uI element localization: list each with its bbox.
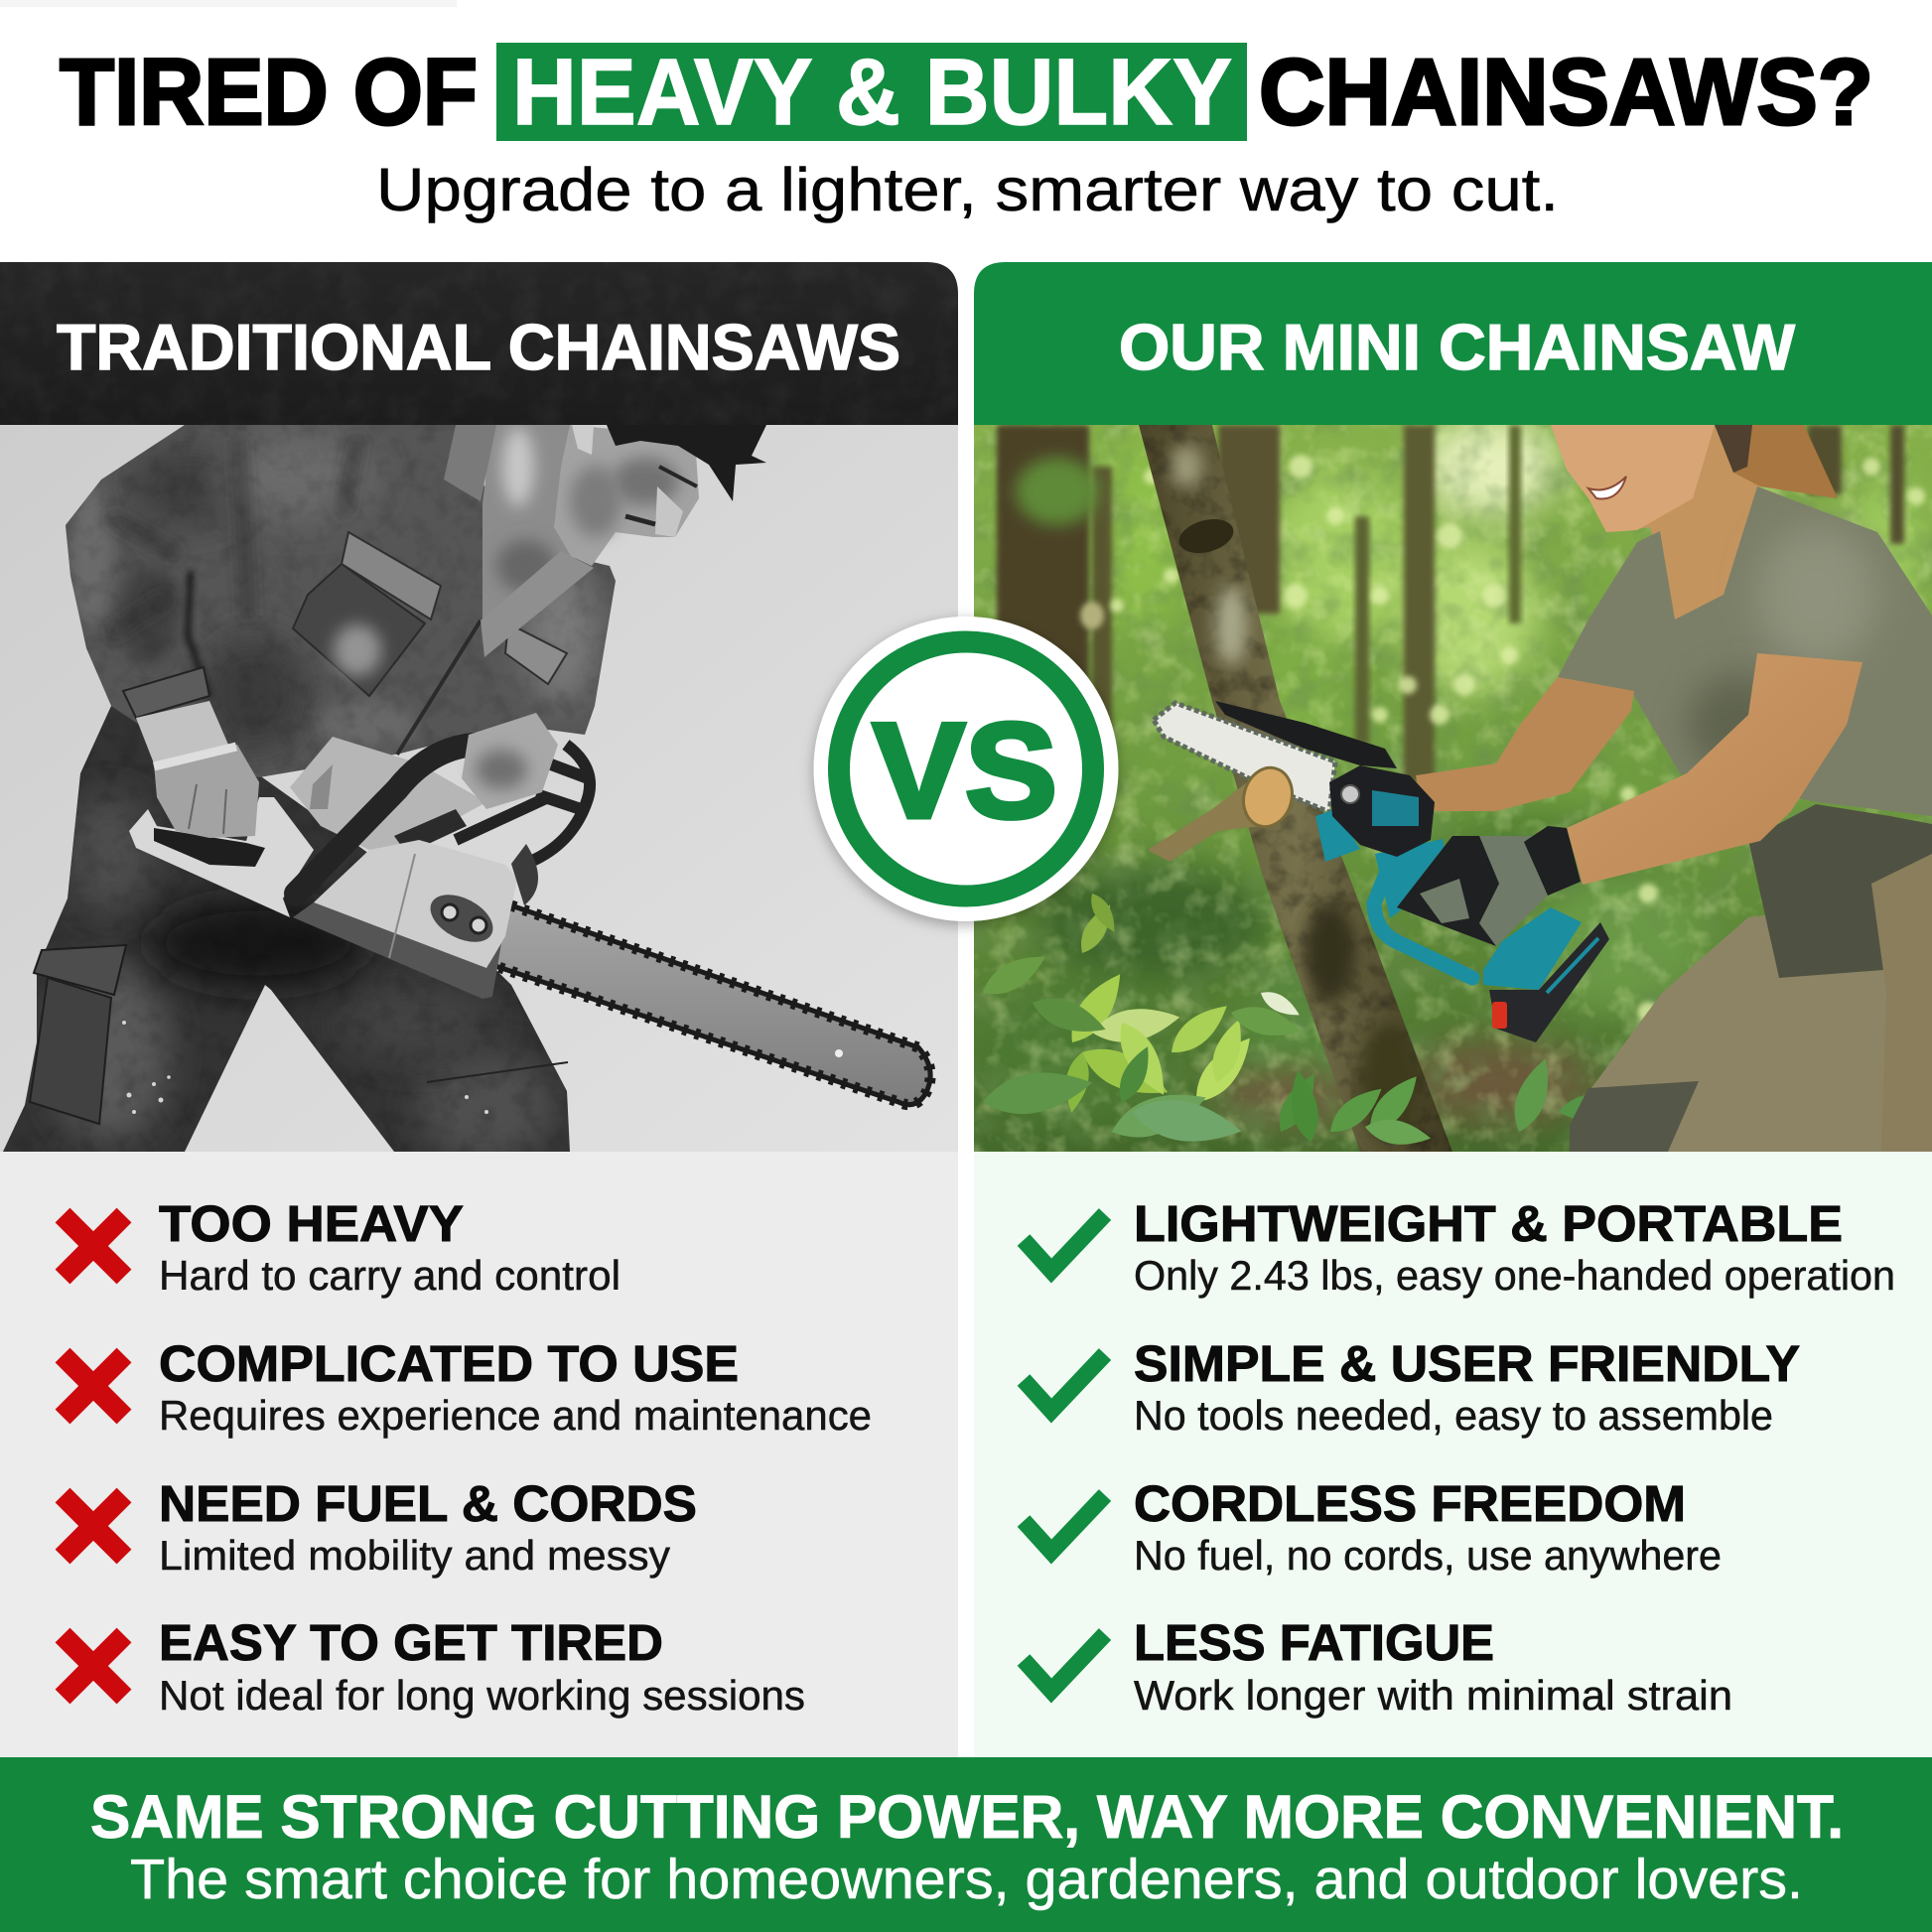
- hand guard: [456, 745, 591, 862]
- battery switch: [1492, 1002, 1507, 1029]
- guard: [1215, 701, 1397, 768]
- panel header: traditional chainsaws: [0, 262, 958, 425]
- footer headline: SAME STRONG CUTTING POWER, WAY MORE CONVENIENT.: [90, 1783, 1844, 1851]
- rear handle: [129, 797, 314, 917]
- heading: TOO HEAVY: [159, 1195, 464, 1252]
- icon: green check: [1024, 1214, 1105, 1271]
- icon: red cross: [63, 1355, 124, 1417]
- item: lightweight and portable: [1024, 1195, 1895, 1299]
- icon: red cross: [63, 1495, 124, 1557]
- panel: traditional chainsaw drawbacks: [0, 1152, 958, 1757]
- neck: [1613, 427, 1760, 620]
- VS badge: VS: [873, 695, 1057, 846]
- foliage texture: [974, 425, 1932, 1152]
- shirt cuff: [123, 667, 209, 718]
- VS badge: [814, 617, 1118, 921]
- handle: [1374, 864, 1472, 978]
- saw body: [293, 902, 501, 999]
- heading: SIMPLE & USER FRIENDLY: [1134, 1335, 1800, 1392]
- rear glove: [136, 701, 259, 838]
- back arm: [1416, 677, 1634, 811]
- item: simple and user friendly: [1024, 1335, 1800, 1439]
- bar: [1154, 703, 1335, 812]
- title: CHAINSAWS?: CHAINSAWS?: [1259, 40, 1873, 145]
- description: Work longer with minimal strain: [1134, 1672, 1732, 1719]
- footer subline: The smart choice for homeowners, gardeners, and outdoor lovers.: [130, 1848, 1803, 1911]
- item: too heavy: [63, 1195, 621, 1299]
- panel: mini chainsaw benefits: [974, 1152, 1932, 1757]
- motor housing: [1329, 765, 1435, 857]
- icon: green check: [1024, 1495, 1105, 1552]
- description: Hard to carry and control: [159, 1252, 621, 1299]
- trousers: [1570, 804, 1932, 1152]
- description: Only 2.43 lbs, easy one-handed operation: [1134, 1252, 1895, 1299]
- woman: [1416, 425, 1932, 1152]
- main tree trunk: [1139, 425, 1452, 1152]
- photo: man straining with a heavy gas chainsaw: [0, 425, 958, 1162]
- t-shirt: [1558, 486, 1932, 816]
- panel header: our mini chainsaw: [974, 262, 1932, 425]
- front arm: [1567, 653, 1863, 885]
- hair: [1715, 425, 1838, 498]
- front glove: [462, 713, 558, 809]
- panel header: traditional chainsaws: TRADITIONAL CHAINSAWS: [57, 311, 900, 383]
- placket: [397, 621, 481, 755]
- face: [1551, 425, 1715, 532]
- description: Not ideal for long working sessions: [159, 1672, 805, 1719]
- icon: red cross: [63, 1215, 124, 1277]
- photo: woman using a mini chainsaw in the forest: [974, 417, 1932, 1152]
- pocket left: [293, 532, 441, 696]
- pocket right: [505, 623, 567, 684]
- item: easy to get tired: [63, 1614, 805, 1719]
- item: complicated to use: [63, 1335, 872, 1439]
- chainsaw: [129, 737, 930, 1105]
- cut branch: [1148, 762, 1299, 862]
- item: cordless freedom: [1024, 1475, 1722, 1579]
- chainsaw body and battery: [1315, 765, 1609, 1042]
- head: [554, 425, 766, 566]
- background trunks: [997, 425, 1904, 782]
- icon: green check: [1024, 1354, 1105, 1411]
- icon: red cross: [63, 1635, 124, 1697]
- description: No fuel, no cords, use anywhere: [1134, 1532, 1722, 1579]
- description: Requires experience and maintenance: [159, 1392, 872, 1439]
- trousers: [0, 695, 596, 1162]
- footer banner: [0, 1757, 1932, 1932]
- description: No tools needed, easy to assemble: [1134, 1392, 1773, 1439]
- icon: green check: [1024, 1634, 1105, 1691]
- title highlight: HEAVY & BULKY: HEAVY & BULKY: [512, 40, 1232, 145]
- mini chainsaw: [1154, 701, 1397, 812]
- subtitle: Upgrade to a lighter, smarter way to cut.: [376, 156, 1559, 223]
- guide bar: [492, 905, 930, 1105]
- bokeh highlights: [1110, 455, 1925, 1024]
- forest bokeh: [983, 417, 1926, 1125]
- heading: NEED FUEL & CORDS: [159, 1475, 697, 1532]
- undergrowth leaves: [983, 894, 1585, 1145]
- item: less fatigue: [1024, 1614, 1732, 1719]
- description: Limited mobility and messy: [159, 1532, 670, 1579]
- heading: COMPLICATED TO USE: [159, 1335, 739, 1392]
- heading: EASY TO GET TIRED: [159, 1614, 663, 1671]
- open collar and chest: [444, 425, 594, 657]
- title: TIRED OF: TIRED OF: [60, 40, 478, 145]
- glove: [1397, 826, 1581, 946]
- heading: LESS FATIGUE: [1134, 1614, 1494, 1671]
- title: [60, 40, 1873, 145]
- panel header: our mini chainsaw: OUR MINI CHAINSAW: [1119, 311, 1796, 383]
- heading: LIGHTWEIGHT & PORTABLE: [1134, 1195, 1843, 1252]
- battery: [1483, 907, 1582, 990]
- front handle: [296, 745, 493, 894]
- item: need fuel and cords: [63, 1475, 697, 1579]
- heading: CORDLESS FREEDOM: [1134, 1475, 1686, 1532]
- engine cover: [290, 737, 486, 854]
- shirt: [60, 425, 616, 782]
